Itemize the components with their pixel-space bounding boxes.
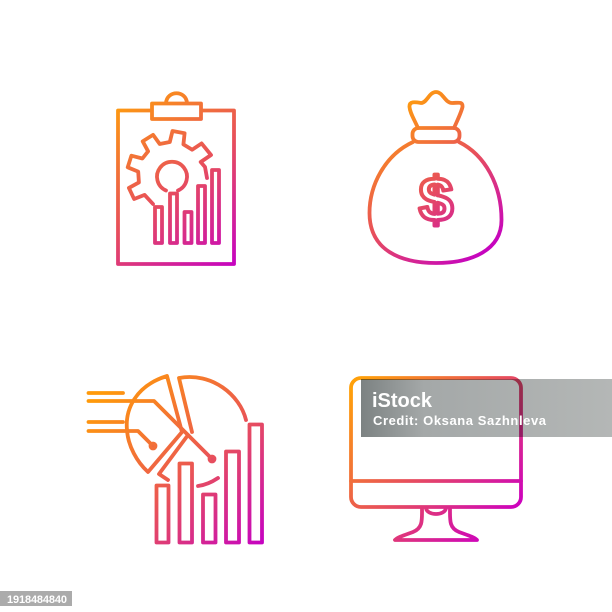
clipboard board	[118, 110, 234, 264]
stand joint	[426, 508, 446, 514]
image id tag	[0, 591, 72, 606]
icon: desktop monitor	[351, 378, 521, 540]
circuit nodes	[150, 444, 156, 448]
dollar sign: $	[419, 166, 453, 235]
monitor stand	[395, 508, 477, 540]
bag neck band	[412, 128, 460, 142]
speed lines	[88, 393, 123, 422]
icon: clipboard with gear and bars	[118, 93, 234, 264]
watermark brand: iStock	[372, 390, 433, 412]
pie slice lower edge	[159, 435, 218, 486]
circuit line lower	[88, 431, 153, 446]
pie slice left	[127, 376, 182, 472]
monitor frame	[351, 378, 521, 507]
watermark band	[361, 379, 612, 437]
bar chart	[155, 170, 219, 243]
image id tag: 1918484840	[7, 594, 67, 606]
bar chart	[156, 424, 262, 542]
gear outline	[128, 131, 211, 204]
icon: money bag	[370, 92, 502, 263]
pie slice right	[179, 377, 246, 432]
circuit line upper	[88, 401, 212, 459]
screen divider	[351, 479, 521, 483]
bag top knot	[409, 92, 463, 128]
bag body	[370, 142, 502, 263]
clipboard clip	[152, 93, 201, 119]
watermark credit: Credit: Oksana Sazhnleva	[373, 413, 547, 428]
icon: pie chart and bars	[88, 376, 262, 542]
gear centre ring	[157, 162, 187, 190]
